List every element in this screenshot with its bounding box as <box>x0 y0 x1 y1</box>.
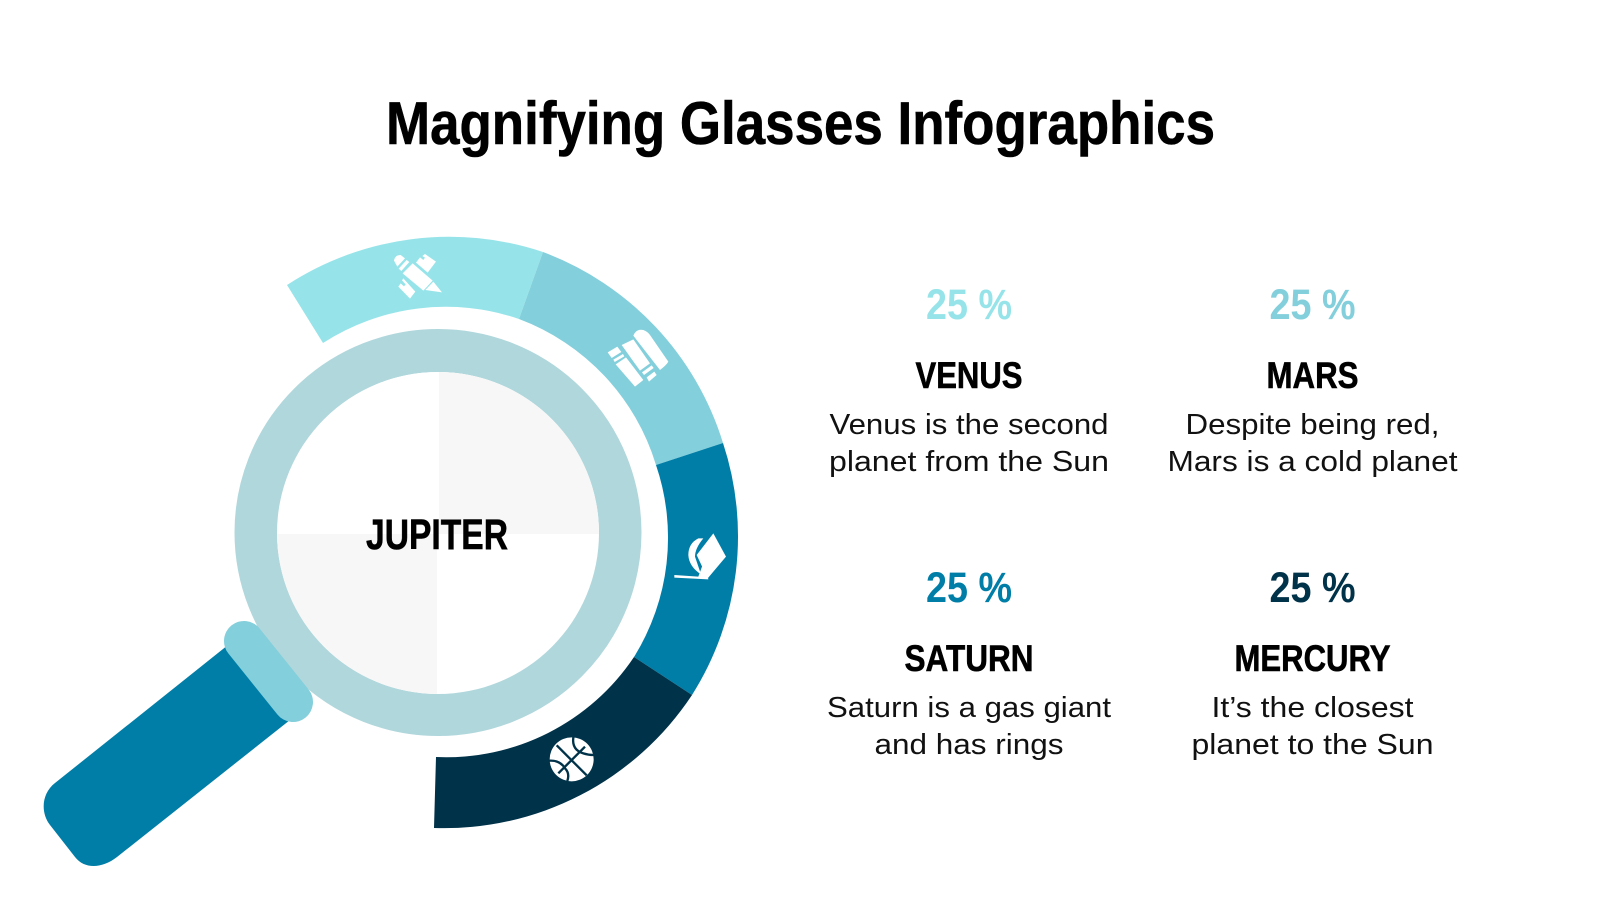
title: Magnifying Glasses Infographics <box>386 90 1215 157</box>
panel: Saturn: 25 % <box>926 564 1012 612</box>
panel: Mars: Mars is a cold planet <box>1168 446 1458 478</box>
panel: Mars <box>1168 281 1458 478</box>
panel: Mercury <box>1192 564 1434 761</box>
panel: Venus: Venus is the second <box>830 409 1108 441</box>
icon: pencil and ruler <box>394 254 442 299</box>
panel: Venus: 25 % <box>926 281 1012 329</box>
panel: Mercury: planet to the Sun <box>1192 729 1434 761</box>
magnifier lens rim <box>256 350 620 714</box>
ring segment: Mercury <box>434 657 692 828</box>
icon: books <box>608 330 668 387</box>
panel: Mars: 25 % <box>1270 281 1356 329</box>
panel: Mars: MARS <box>1266 355 1358 396</box>
magnifier lens <box>277 372 599 694</box>
center label: JUPITER <box>366 511 508 559</box>
icon: eraser <box>674 533 726 579</box>
panel: Venus: VENUS <box>916 355 1022 396</box>
panel: Mercury: MERCURY <box>1234 638 1391 679</box>
ring segment: Venus <box>287 237 543 343</box>
panel: Mars: Despite being red, <box>1186 409 1440 441</box>
panel: Saturn: and has rings <box>874 729 1064 761</box>
panel: Mercury: 25 % <box>1270 564 1356 612</box>
panel: Mercury: It’s the closest <box>1212 692 1414 724</box>
panel: Saturn <box>827 564 1111 761</box>
ring segment: Mars <box>519 252 723 465</box>
icon: basketball <box>549 737 594 781</box>
panel: Venus <box>829 281 1109 478</box>
magnifier collar <box>244 641 293 702</box>
ring segment: Saturn <box>634 443 738 695</box>
panel: Saturn: Saturn is a gas giant <box>827 692 1111 724</box>
magnifying glass diagram <box>44 237 738 866</box>
magnifier handle <box>44 645 290 866</box>
panel: Saturn: SATURN <box>904 638 1034 679</box>
panel: Venus: planet from the Sun <box>829 446 1109 478</box>
